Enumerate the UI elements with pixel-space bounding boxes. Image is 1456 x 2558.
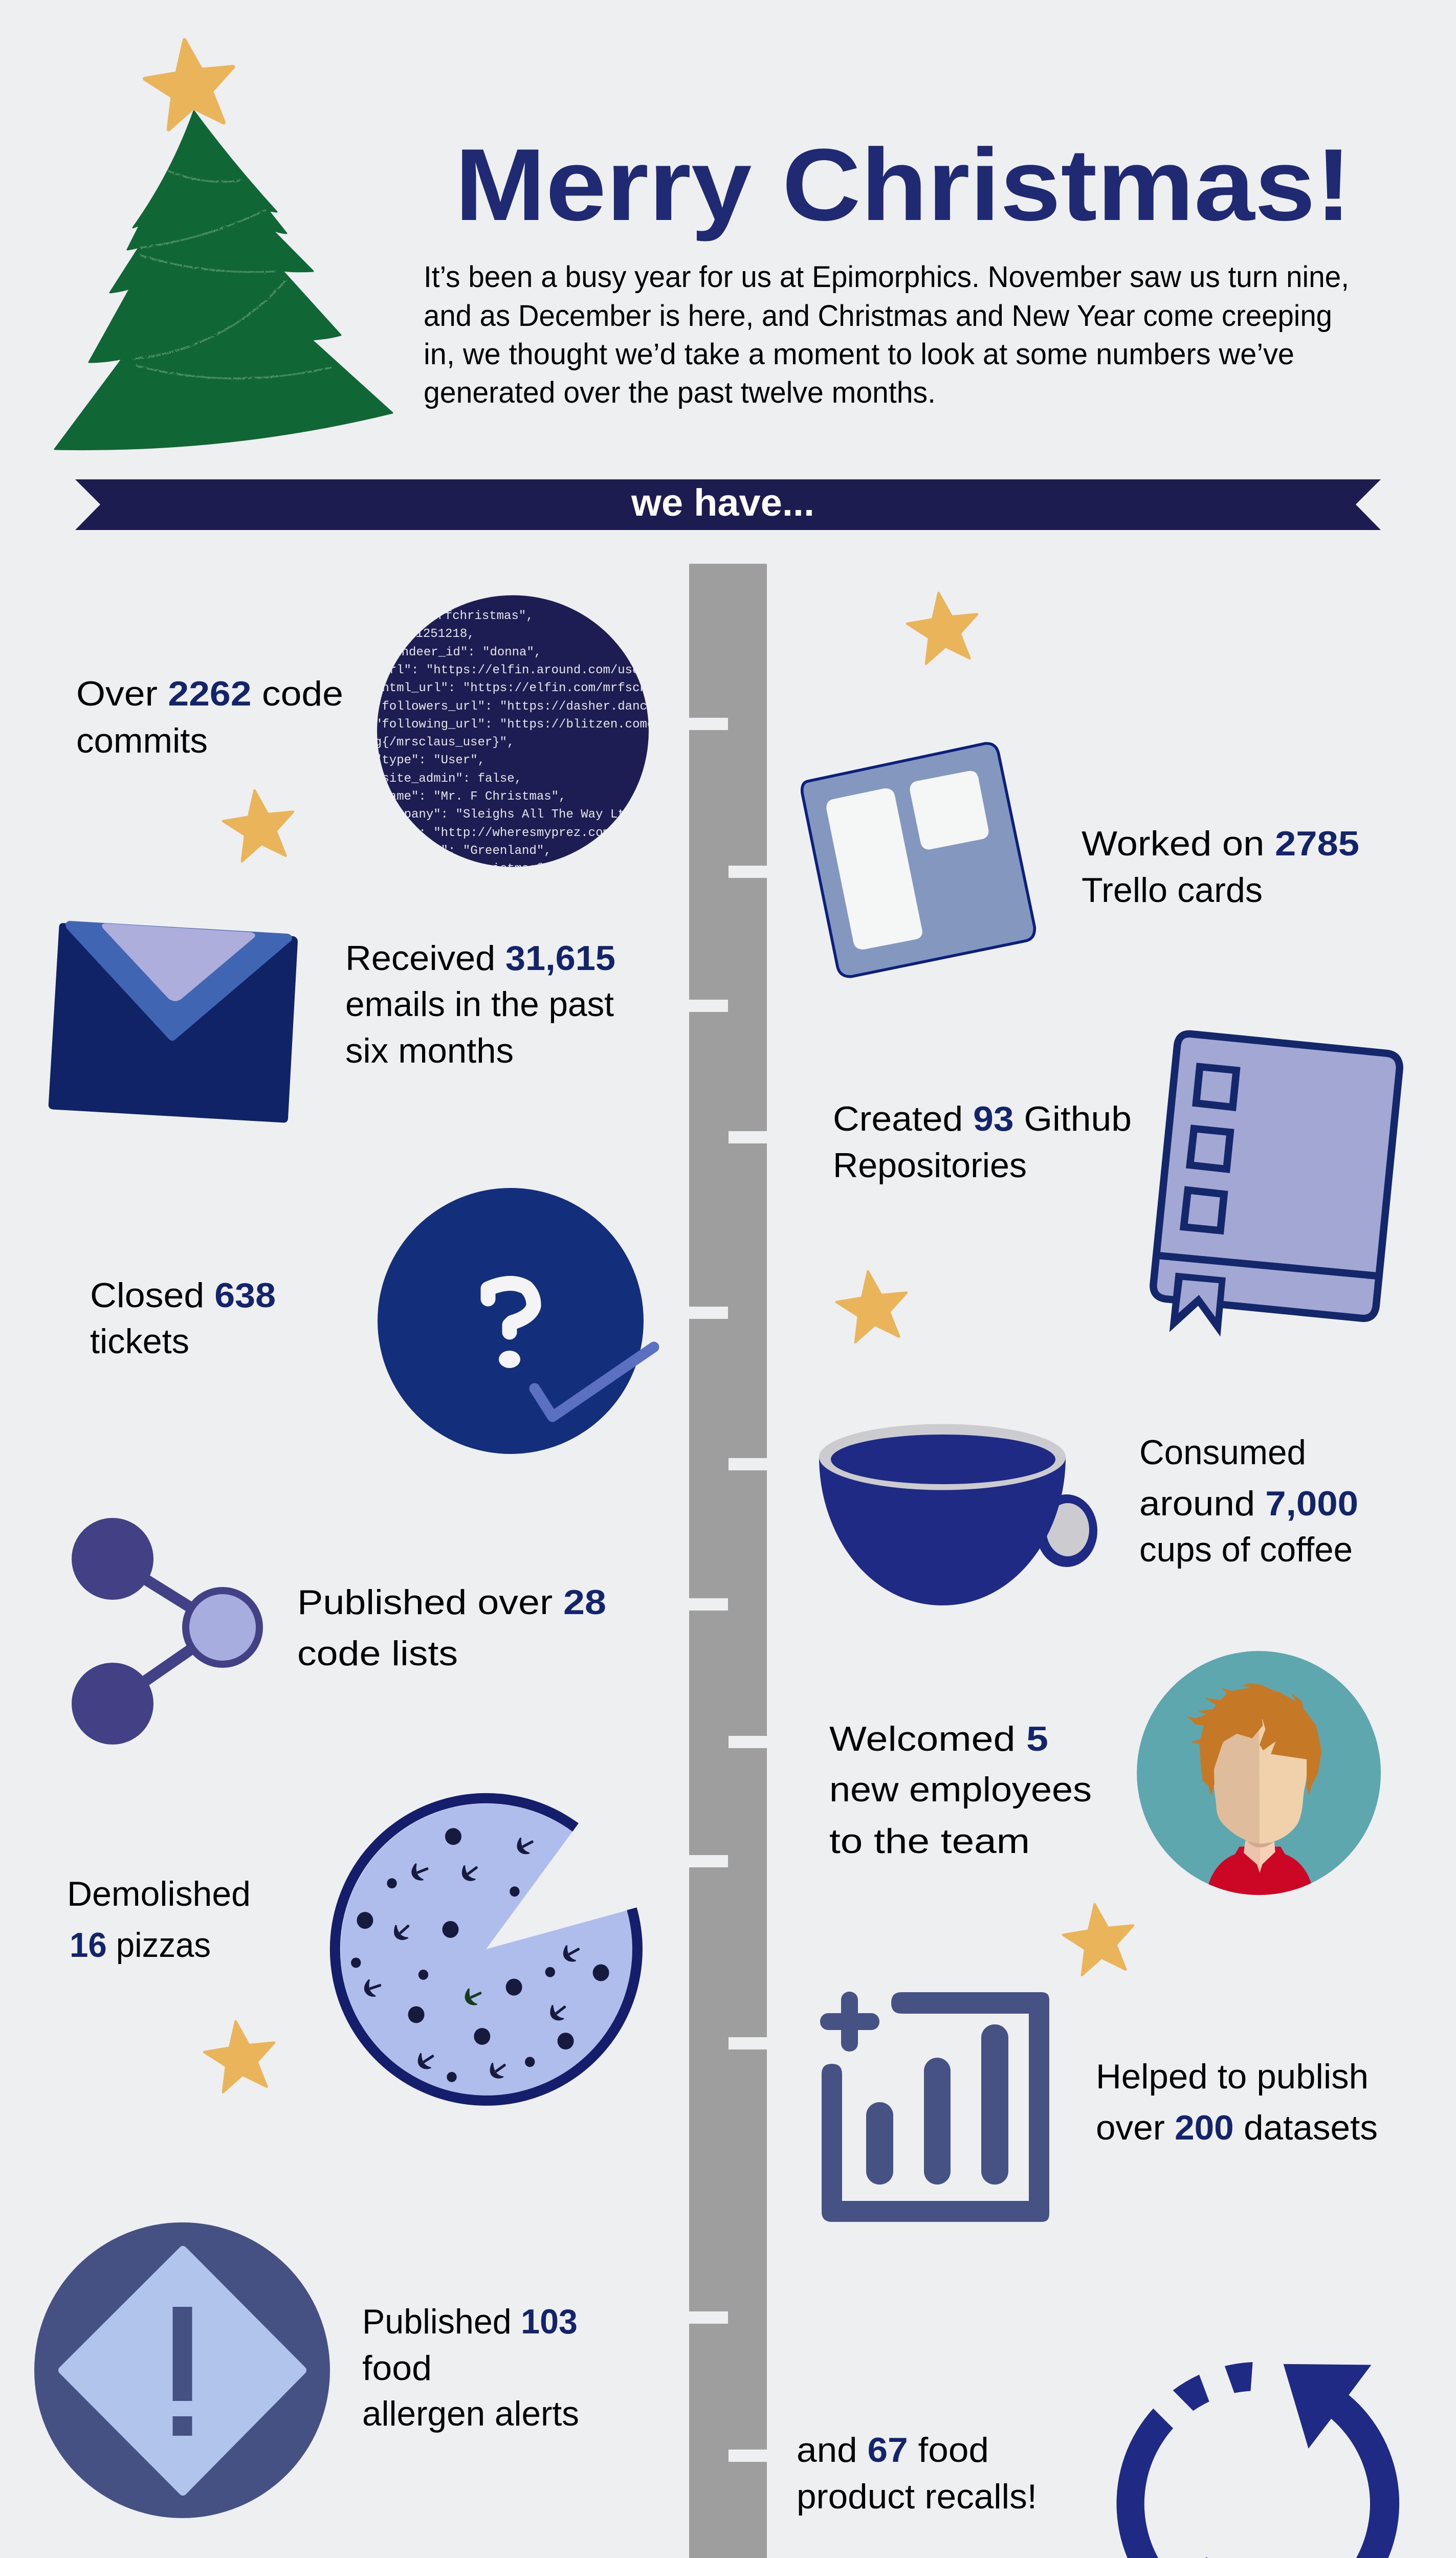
stat: new employees: new employees	[829, 1770, 1092, 1809]
icon: envelope	[49, 921, 298, 1122]
decoration: star near timeline top	[907, 593, 977, 664]
stat: allergen alerts: allergen alerts	[362, 2394, 579, 2433]
christmas tree with code garlands: "html_url": "https://github.com/octocat", "followers_url":	[168, 169, 241, 183]
intro text block: and as December is here, and Christmas and New Year come creeping	[424, 299, 1332, 333]
stat: tickets: tickets	[90, 1322, 189, 1361]
icon: employee avatar	[1137, 1651, 1381, 1901]
stat: emails: emails in the past	[345, 985, 614, 1024]
stat: product recalls	[797, 2431, 1037, 2516]
stat: trello cards: Worked on 2785	[1082, 824, 1359, 863]
icon: tree-top star	[145, 40, 233, 129]
stat: new employees: to the team	[829, 1822, 1030, 1861]
icon: code circle: "blog": "http://wheresmyprez.com",	[374, 826, 625, 840]
icon: pizza	[335, 1798, 637, 2101]
icon: coffee cup	[819, 1424, 1097, 1605]
stat: code commits: Over 2262 code	[76, 674, 343, 713]
icon: code circle: "name": "Mr. F Christmas",	[374, 790, 566, 804]
stat: new employees: Welcomed 5	[829, 1719, 1048, 1758]
intro text block: generated over the past twelve months.	[424, 376, 936, 409]
stat: pizzas: 16 pizzas	[70, 1926, 211, 1965]
stat: datasets	[1096, 2057, 1378, 2147]
icon: github repository book	[1153, 1034, 1400, 1337]
decoration: star beside pizza	[204, 2021, 274, 2092]
icon: code circle: "html_url": "https://elfin.com/mrfschristmas",	[374, 681, 714, 695]
icon: code circle: "company": "Sleighs All The Way Ltd",	[374, 808, 647, 822]
icon: code circle: "id": 1251218,	[371, 627, 475, 641]
stat: allergen alerts: food	[362, 2349, 432, 2388]
icon: code circle: "login": "mrfchristmas",	[357, 609, 534, 623]
icon: code circle: "location": "Greenland",	[374, 844, 551, 858]
stat: trello cards: Trello cards	[1082, 871, 1263, 910]
icon: code circle: "site_admin": false,	[374, 772, 522, 786]
stat: github repositories: Repositories	[833, 1146, 1027, 1185]
icon: code circle: "url": "https://elfin.around.com/users/mrfchristmas",	[374, 664, 765, 677]
icon: code lists network	[72, 1518, 259, 1745]
icon: code circle: ing{/mrsclaus_user}",	[360, 736, 514, 749]
icon: recall cycle arrows	[1116, 2362, 1399, 2558]
stat: emails: Received 31,615	[345, 939, 615, 978]
stat: trello cards	[1082, 824, 1359, 910]
christmas tree with code garlands: "blog": "https://github. "received_events_url": "https://api.github.com/users/octocat/received_events",	[140, 254, 276, 273]
stat: tickets	[90, 1276, 276, 1361]
icon: code circle: "followers_url": "https://dasher.dancer/followers",	[374, 700, 751, 714]
stat: code commits	[76, 674, 343, 760]
title: Merry Christmas!	[455, 128, 1352, 242]
icon: dataset chart	[820, 1992, 1049, 2222]
stat: code lists: code lists	[297, 1634, 458, 1673]
icon: code circle: "email": "mrfchristmas@elf.org",	[374, 862, 610, 876]
icon: code circle: "reindeer_id": "donna",	[372, 646, 541, 659]
christmas tree with code garlands: "login": "octocat""avatar_url": "https://github.com/images/error/octocat_happy.gif""url": "https://api.github.com/users/octocat""site_admin": false,	[136, 364, 333, 380]
decoration: star under employees	[1063, 1904, 1133, 1975]
banner: we have: we have...	[631, 481, 814, 524]
stat: datasets: Helped to publish	[1096, 2057, 1369, 2096]
stat: emails: six months	[345, 1031, 514, 1070]
stat: allergen alerts	[362, 2302, 579, 2433]
icon: trello board	[802, 743, 1034, 977]
stat: datasets: over 200 datasets	[1096, 2108, 1378, 2147]
decoration: star under commits	[223, 790, 293, 862]
icon: code circle: "type": "User",	[374, 754, 485, 767]
timeline bar with ticks	[689, 564, 767, 2558]
icon: code circle	[377, 596, 649, 867]
stat: allergen alerts: Published 103	[362, 2302, 578, 2341]
stat: github repositories: Created 93 Github	[833, 1099, 1132, 1138]
stat: pizzas	[67, 1875, 251, 1965]
icon: code circle: "following_url": "https://blitzen.comet/following",	[374, 718, 751, 732]
icon: question ticket circle	[378, 1188, 654, 1454]
stat: code commits: commits	[76, 721, 208, 760]
christmas tree with code garlands: "gists_url": "https://api.github.com/users/octocat/gists{/gist_id}", "name": "monalisa octocat", "co	[139, 209, 266, 249]
stat: github repositories	[833, 1099, 1132, 1185]
stat: code lists	[297, 1583, 606, 1673]
christmas tree with code garlands: "public_gists": "https://api.github.com/orgs{/org}", "created_at": "2008-01-14T04:33:35Z", "type":	[133, 280, 287, 360]
stat: emails	[345, 939, 615, 1070]
stat: tickets: Closed 638	[90, 1276, 276, 1315]
stat: coffee	[1139, 1433, 1358, 1569]
banner: we have	[75, 479, 1381, 530]
stat: coffee: cups of coffee	[1139, 1530, 1353, 1569]
intro text block: in, we thought we’d take a moment to look at some numbers we’ve	[424, 338, 1294, 371]
stat: code lists: Published over 28	[297, 1583, 606, 1622]
stat: product recalls: and 67 food	[797, 2431, 989, 2469]
stat: product recalls: product recalls!	[797, 2477, 1037, 2516]
christmas tree with code garlands	[54, 111, 393, 450]
stat: pizzas: Demolished	[67, 1875, 251, 1913]
stat: coffee: Consumed	[1139, 1433, 1306, 1472]
icon: allergen alert	[34, 2222, 330, 2518]
stat: coffee: around 7,000	[1139, 1484, 1358, 1523]
intro text block	[424, 260, 1349, 409]
decoration: star under github text	[836, 1271, 907, 1342]
intro text block: It’s been a busy year for us at Epimorphics. November saw us turn nine,	[424, 260, 1349, 294]
stat: new employees	[829, 1719, 1092, 1861]
